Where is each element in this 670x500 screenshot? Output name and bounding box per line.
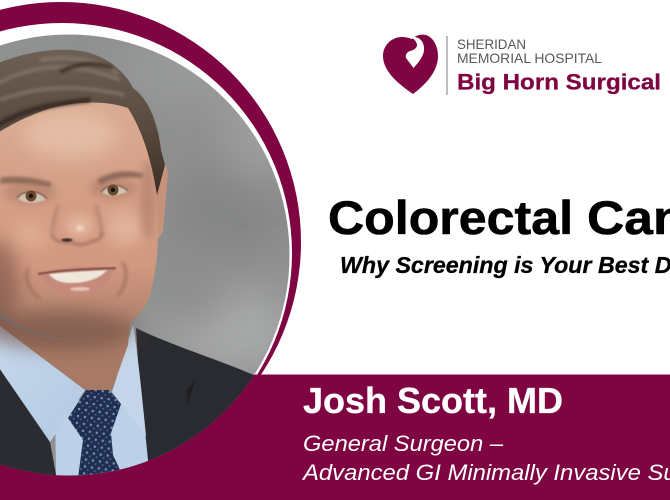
presenter role	[301, 431, 670, 485]
logo	[383, 35, 661, 95]
maroon name band	[0, 374, 670, 500]
eyes	[17, 184, 128, 203]
neck	[0, 318, 130, 390]
maroon circle ring	[0, 2, 301, 482]
jacket	[0, 328, 256, 480]
portrait photo	[0, 30, 300, 480]
white circle ring	[0, 23, 292, 374]
logo text: Big Horn Surgical: Big Horn Surgical	[457, 70, 661, 94]
icon: heart	[383, 35, 438, 94]
photo backdrop	[0, 30, 300, 480]
logo text: hospital name: MEMORIAL HOSPITAL	[457, 51, 602, 66]
ear	[156, 164, 168, 238]
nose	[52, 205, 102, 245]
logo text: hospital name: SHERIDAN	[457, 37, 526, 52]
tie	[68, 390, 121, 478]
presenter role: General Surgeon –	[303, 431, 504, 456]
hair	[0, 50, 165, 195]
face	[0, 95, 158, 350]
smile	[37, 266, 117, 292]
shirt and collar	[0, 322, 150, 480]
presenter name: Josh Scott, MD	[303, 380, 563, 421]
eyebrows	[0, 171, 143, 187]
logo text: hospital name	[457, 37, 602, 66]
title	[328, 191, 670, 244]
logo divider	[446, 36, 448, 95]
title: Colorectal	[328, 191, 573, 244]
